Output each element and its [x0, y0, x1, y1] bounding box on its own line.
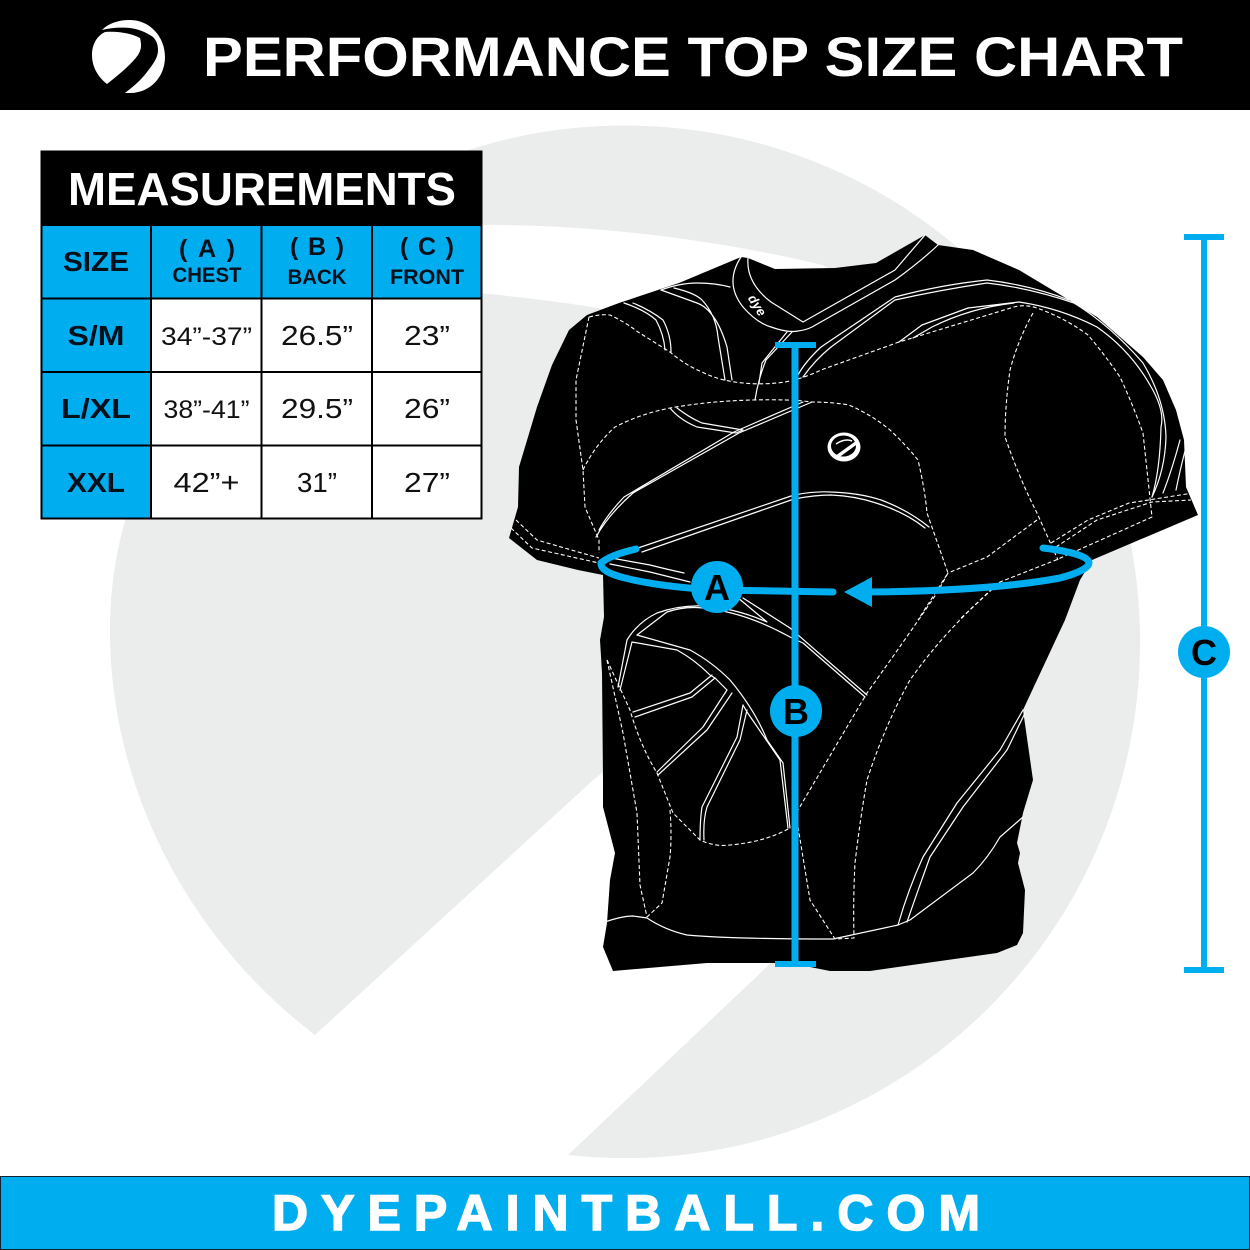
size labels	[61, 320, 131, 498]
size labels: XXL	[67, 467, 125, 498]
table cell backgrounds	[41, 226, 482, 518]
measurement loop A: chest circumference: A	[704, 567, 730, 608]
measurement values: 38”-41”	[164, 396, 250, 424]
measurement values: 26”	[404, 393, 450, 424]
table heading	[41, 151, 482, 226]
measurements table	[41, 151, 482, 518]
shirt illustration	[509, 235, 1198, 971]
small brand text on collar: dye	[745, 292, 770, 319]
column headers: ( C )	[400, 233, 454, 261]
header banner	[0, 0, 1250, 110]
icon: brand logo	[92, 20, 165, 93]
table heading: MEASUREMENTS	[68, 163, 456, 215]
table grid	[41, 152, 482, 518]
column headers: CHEST	[172, 264, 242, 287]
measurement values	[161, 320, 450, 498]
measurement values: 27”	[404, 467, 450, 498]
measurement line B: back length: B	[783, 691, 809, 732]
column headers: ( B )	[290, 233, 344, 261]
column headers: BACK	[288, 266, 346, 289]
measurement line C: front length	[1178, 237, 1230, 970]
measurement values: 29.5”	[281, 393, 353, 424]
column headers: ( A )	[179, 235, 235, 263]
size labels: S/M	[68, 320, 124, 351]
title: PERFORMANCE TOP SIZE CHART	[203, 25, 1183, 88]
footer banner: DYEPAINTBALL.COM	[272, 1185, 980, 1241]
footer banner	[0, 1176, 1250, 1250]
measurement values: 26.5”	[281, 320, 353, 351]
measurement line B: back length	[770, 345, 822, 965]
measurement values: 34”-37”	[161, 323, 252, 351]
measurement values: 31”	[297, 467, 337, 498]
measurement values: 23”	[404, 320, 450, 351]
measurement line C: front length: C	[1191, 632, 1217, 673]
shirt solid seam lines	[596, 235, 1186, 939]
measurement values: 42”+	[174, 467, 240, 498]
size labels: L/XL	[61, 393, 131, 424]
measurement loop A: chest circumference	[601, 548, 1089, 613]
column headers	[63, 233, 464, 289]
shirt dashed stitching	[511, 306, 1193, 939]
background watermark logo	[110, 125, 1140, 1158]
icon: chest logo	[828, 432, 860, 462]
column headers: SIZE	[63, 246, 129, 277]
column headers: FRONT	[390, 266, 464, 289]
shirt silhouette	[509, 235, 1198, 971]
